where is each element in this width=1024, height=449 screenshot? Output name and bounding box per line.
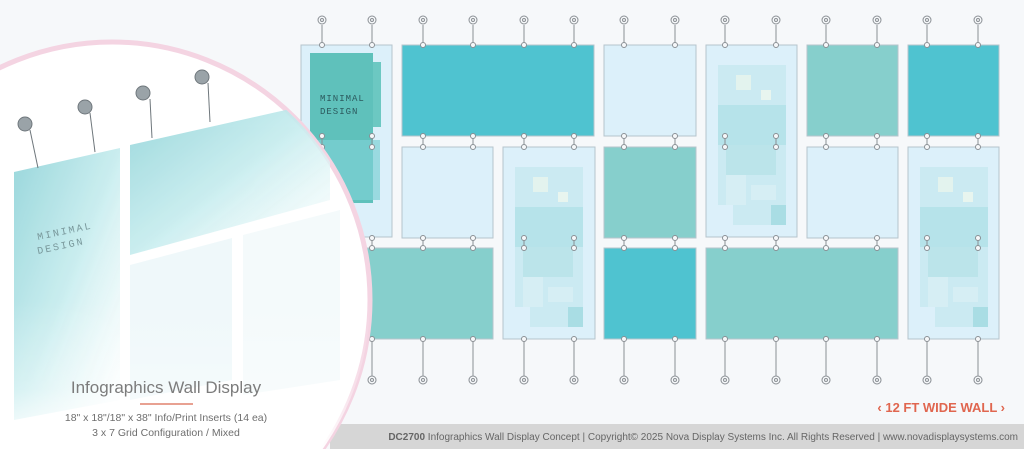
perspective panels [14, 100, 340, 420]
panel: light [604, 45, 696, 136]
panel: tall pattern 3 [908, 147, 999, 339]
panel: muted teal [807, 45, 898, 136]
panel: wide muted row3 left [301, 248, 493, 339]
divider red [140, 403, 193, 405]
panel: tall poster: DESIGN [320, 107, 358, 117]
wall grid [301, 45, 999, 339]
hardware [18, 70, 210, 168]
panel: light row2 [402, 147, 493, 238]
subtitle: 3 x 7 Grid Configuration / Mixed [92, 427, 240, 439]
panel: wide teal top [402, 45, 594, 136]
perspective panels: MINIMAL [37, 222, 94, 244]
subtitle: 18" x 18"/18" x 38" Info/Print Inserts (14 ea) [65, 412, 267, 424]
hangers [318, 16, 982, 384]
panel: teal row3 [604, 248, 696, 339]
subtitle [65, 412, 267, 439]
perspective panels: DESIGN [37, 237, 86, 258]
footer bar: DC2700 Infographics Wall Display Concept | Copyright© 2025 Nova Display Systems Inc. All Rights Reserved | www.novadisplaysystems.com [388, 432, 1018, 443]
label: 12 ft wide wall: ‹ 12 FT WIDE WALL › [877, 400, 1005, 415]
panel: tall poster [301, 45, 392, 237]
panel: muted teal row2 [604, 147, 696, 238]
panel: wide muted row3 right [706, 248, 898, 339]
footer bar [330, 424, 1024, 449]
panel: light row2 right [807, 147, 898, 238]
title: Infographics Wall Display [71, 378, 262, 397]
panel: tall pattern 2 [503, 147, 595, 339]
detail circle [0, 42, 380, 449]
panel: tall pattern 1 [706, 45, 797, 237]
panel: tall poster: MINIMAL [320, 94, 365, 104]
panel: teal [908, 45, 999, 136]
